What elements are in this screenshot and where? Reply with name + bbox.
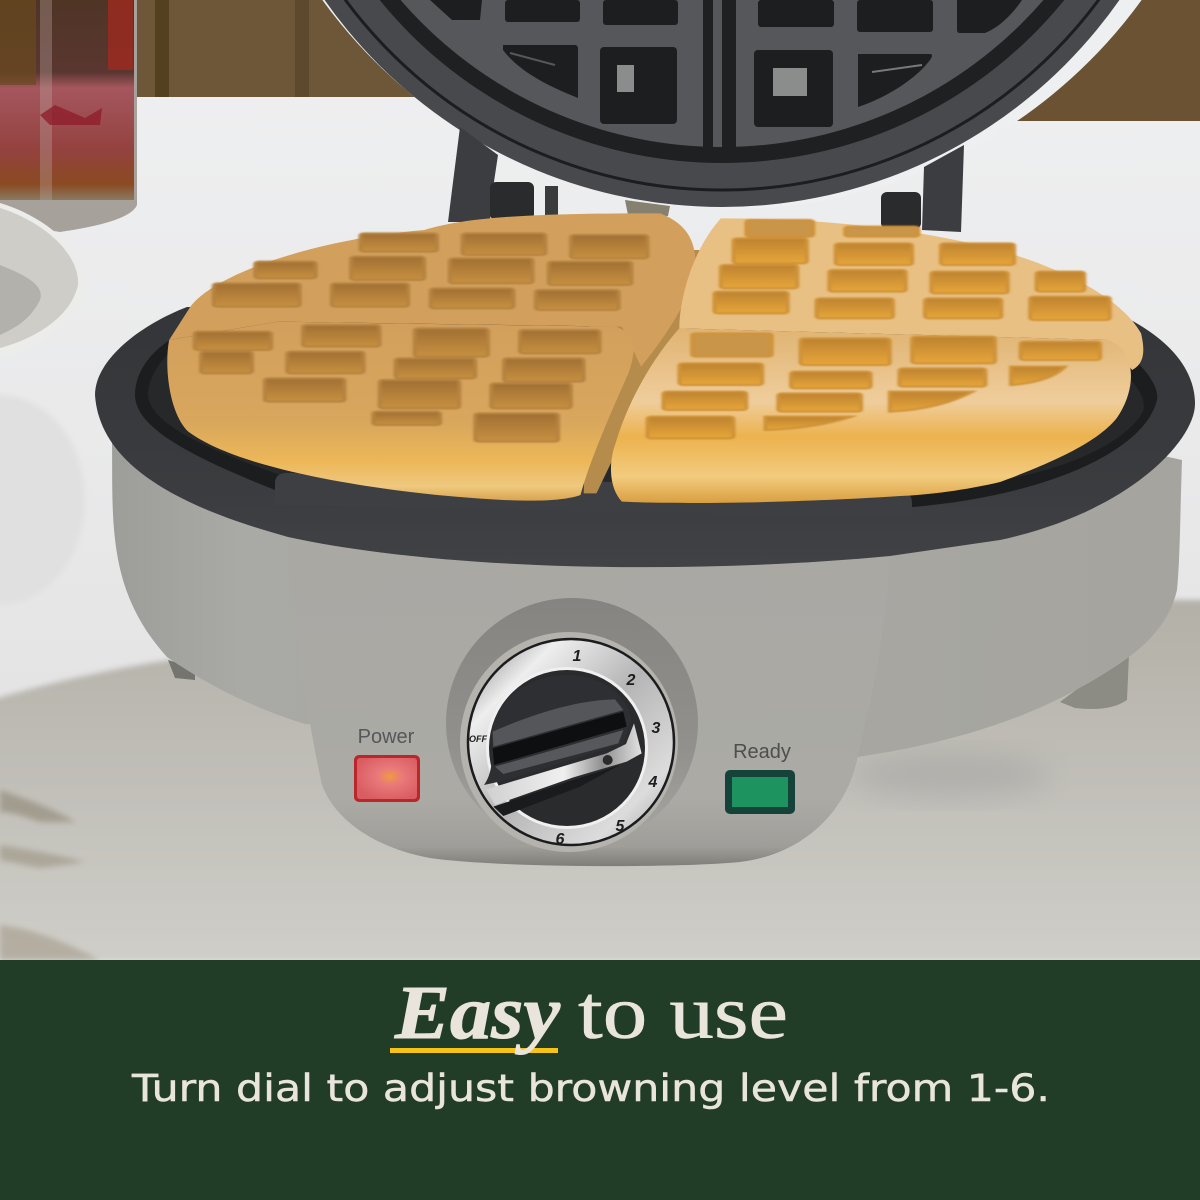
appliance feet <box>168 654 1129 709</box>
lower cooking rim <box>95 307 1195 567</box>
appliance base body <box>112 420 1182 757</box>
back-left waffle quarter <box>169 213 695 367</box>
hinges <box>448 127 964 232</box>
front-left waffle quarter <box>167 322 634 501</box>
front control panel <box>288 537 890 866</box>
lid nonstick plate <box>237 0 1200 207</box>
ready label: Ready <box>733 741 791 763</box>
waffles <box>167 213 1143 503</box>
lid silver shell <box>226 0 1200 209</box>
dial numbers: 6 <box>556 831 565 848</box>
dial numbers: 2 <box>626 672 636 689</box>
dial recess <box>446 598 698 848</box>
lid grid pockets <box>430 0 1022 127</box>
ready lamp <box>725 770 795 814</box>
browning dial <box>460 632 678 852</box>
dial numbers: OFF <box>469 734 487 744</box>
dial numbers: 4 <box>648 774 658 791</box>
dial numbers <box>469 648 661 848</box>
waffle centre gap fill <box>584 250 711 493</box>
heading: Easy <box>394 971 560 1055</box>
heading: to use <box>578 971 788 1055</box>
dial numbers: 5 <box>616 818 626 835</box>
plate <box>0 203 85 358</box>
waffle maker lid <box>226 0 1200 209</box>
syrup jar <box>0 0 137 232</box>
dial numbers: 1 <box>573 648 582 665</box>
power lamp <box>354 755 420 802</box>
dial knob <box>484 675 642 816</box>
dial numbers: 3 <box>652 720 661 737</box>
background scene: wood wall and marble counter <box>0 0 1200 960</box>
heading <box>394 971 788 1055</box>
front handle lip <box>275 473 912 518</box>
front-right waffle quarter <box>611 328 1131 503</box>
heading underline <box>390 1048 558 1053</box>
inner tray <box>135 325 1157 507</box>
bottom banner <box>0 960 1200 1200</box>
power label: Power <box>358 726 415 748</box>
back-right waffle quarter <box>679 218 1143 370</box>
subheading: Turn dial to adjust browning level from 1-6. <box>131 1067 1050 1110</box>
